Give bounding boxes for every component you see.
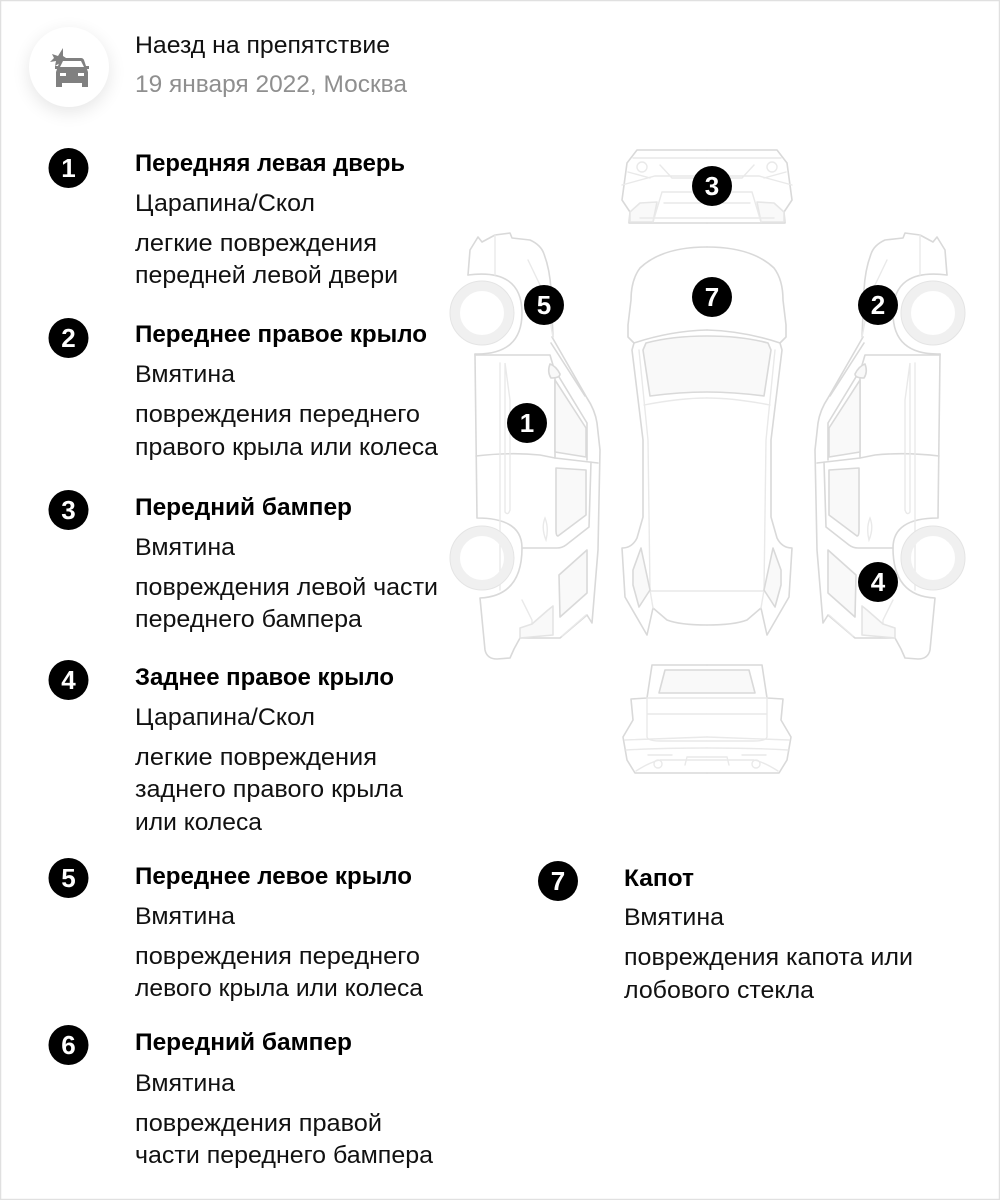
left side view [450,233,600,659]
item 2: правого крыла или колеса [135,434,439,461]
item 4: Царапина/Скол [135,704,315,731]
marker 5 on left fender: 5 [537,290,551,320]
item 3: переднего бампера [135,606,363,633]
item 1: легкие повреждения [135,230,377,257]
item 7: лобового стекла [624,977,815,1004]
item 7 [538,861,913,1004]
item 7: повреждения капота или [624,944,913,971]
item 2: Вмятина [135,361,236,388]
item 6: Вмятина [135,1070,236,1097]
title: Наезд на препятствие [135,32,390,59]
item 6: части переднего бампера [135,1142,434,1169]
item 5: Переднее левое крыло [135,863,412,890]
item 5: левого крыла или колеса [135,975,424,1002]
item 7: Капот [624,865,694,892]
item 4: Заднее правое крыло [135,664,394,691]
item 4: легкие повреждения [135,744,377,771]
front bumper view [622,150,792,223]
item 7: 7 [551,866,565,896]
item 3 [48,490,438,633]
item 3: повреждения левой части [135,574,438,601]
item 4: 4 [61,665,76,695]
marker 1 on left door: 1 [520,408,534,438]
item 2 [48,318,439,461]
item 1: передней левой двери [135,262,398,289]
title [135,32,408,98]
car diagram [450,150,965,773]
item 4: заднего правого крыла [135,776,404,803]
marker 2 on right fender [858,285,898,325]
item 3: 3 [61,495,76,525]
item 3: Передний бампер [135,494,352,521]
item 1: Царапина/Скол [135,190,315,217]
marker 7 on hood: 7 [705,282,719,312]
item 1: 1 [61,153,76,183]
item 7: Вмятина [624,904,725,931]
right side view [815,233,965,659]
item 5: повреждения переднего [135,943,420,970]
marker 4 on right rear [858,562,898,602]
item 6 [48,1025,434,1169]
item 6: повреждения правой [135,1110,382,1137]
icon: collision car [29,27,109,112]
item 4: или колеса [135,809,263,836]
marker 7 on hood [692,277,732,317]
item 5: Вмятина [135,903,236,930]
marker 3 on front [692,166,732,206]
rear view [623,665,791,773]
item 5 [48,858,424,1002]
item 5: 5 [61,863,76,893]
item 2: повреждения переднего [135,401,420,428]
item 6: Передний бампер [135,1029,352,1056]
item 2: 2 [61,323,76,353]
item 3: Вмятина [135,534,236,561]
top view [622,247,792,635]
item 4 [48,660,404,836]
marker 2 on right fender: 2 [871,290,885,320]
marker 4 on right rear: 4 [871,567,886,597]
item 1: Передняя левая дверь [135,150,405,177]
marker 3 on front: 3 [705,171,719,201]
item 1 [48,148,405,289]
item 6: 6 [61,1030,76,1060]
marker 5 on left fender [524,285,564,325]
title: 19 января 2022, Москва [135,71,408,98]
marker 1 on left door [507,403,547,443]
item 2: Переднее правое крыло [135,321,427,348]
